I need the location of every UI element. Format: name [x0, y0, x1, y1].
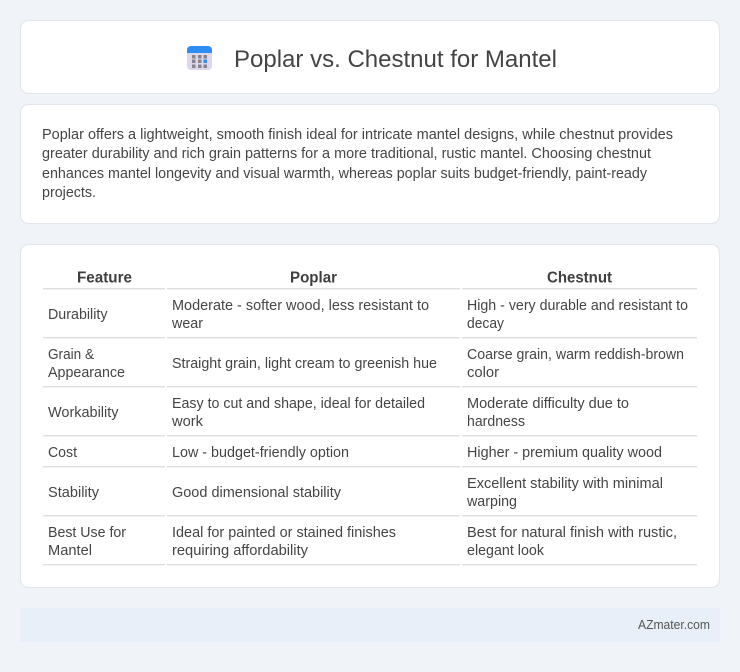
table row: best use for mantel: [43, 525, 697, 565]
table row: durability: High - very durable and resistant to: [467, 298, 688, 314]
table row: durability: Moderate - softer wood, less resistant to: [172, 298, 429, 314]
table row: stability: Stability: [48, 485, 100, 501]
table header row: Poplar: [290, 270, 337, 286]
table row: workability: [43, 396, 697, 436]
footer bar: [20, 608, 720, 642]
table row: grain and appearance: [43, 347, 697, 387]
text block: summary paragraph: Poplar offers a lightweight, smooth finish ideal for intricate mantel designs, while chestnut provides: [42, 127, 673, 143]
table row: durability: Durability: [48, 307, 108, 323]
table header row: [43, 270, 697, 289]
table row: stability: Good dimensional stability: [172, 485, 342, 501]
table row: cost: Cost: [48, 445, 77, 461]
table row: cost: Higher - premium quality wood: [467, 445, 662, 461]
table row: grain and appearance: Grain &: [48, 347, 94, 363]
panel: title header: [20, 20, 720, 94]
title: Poplar vs. Chestnut for Mantel: [234, 46, 557, 73]
panel: intro text: [20, 104, 720, 224]
table row: grain and appearance: Straight grain, light cream to greenish hue: [172, 356, 437, 372]
table header row: Chestnut: [547, 270, 612, 286]
table row: grain and appearance: color: [467, 365, 499, 381]
table row: workability: Workability: [48, 405, 119, 421]
text block: summary paragraph: projects.: [42, 185, 96, 201]
table row: stability: Excellent stability with minimal: [467, 476, 663, 492]
footer credit: AZmater.com: [638, 617, 710, 632]
panel: comparison table: [20, 244, 720, 588]
table row: grain and appearance: Coarse grain, warm reddish-brown: [467, 347, 684, 363]
table row: durability: decay: [467, 316, 505, 332]
table row: best use for mantel: requiring affordability: [172, 543, 309, 559]
table row: best use for mantel: Ideal for painted or stained finishes: [172, 525, 396, 541]
table row: workability: Moderate difficulty due to: [467, 396, 629, 412]
table row: best use for mantel: elegant look: [467, 543, 545, 559]
text block: summary paragraph: greater durability and rich grain patterns for a more traditional, rustic mantel. Choosing chestnut: [42, 146, 651, 162]
icon: calendar: [187, 46, 212, 70]
table row: durability: wear: [171, 316, 203, 332]
table row: cost: [43, 445, 697, 467]
table row: grain and appearance: Appearance: [48, 365, 125, 381]
table row: workability: hardness: [467, 414, 525, 430]
table row: best use for mantel: Best for natural finish with rustic,: [467, 525, 677, 541]
table row: stability: warping: [466, 494, 517, 510]
text block: summary paragraph: enhances mantel longevity and visual warmth, whereas poplar suits budget-friendly, paint-ready: [42, 166, 648, 182]
table row: durability: [43, 298, 697, 338]
table header row: Feature: [77, 270, 132, 286]
table row: best use for mantel: Mantel: [48, 543, 92, 559]
table row: workability: Easy to cut and shape, ideal for detailed: [172, 396, 425, 412]
table row: workability: work: [171, 414, 204, 430]
table row: best use for mantel: Best Use for: [48, 525, 126, 541]
table row: cost: Low - budget-friendly option: [172, 445, 349, 461]
text block: summary paragraph: [42, 127, 673, 201]
table row: stability: [43, 476, 697, 516]
